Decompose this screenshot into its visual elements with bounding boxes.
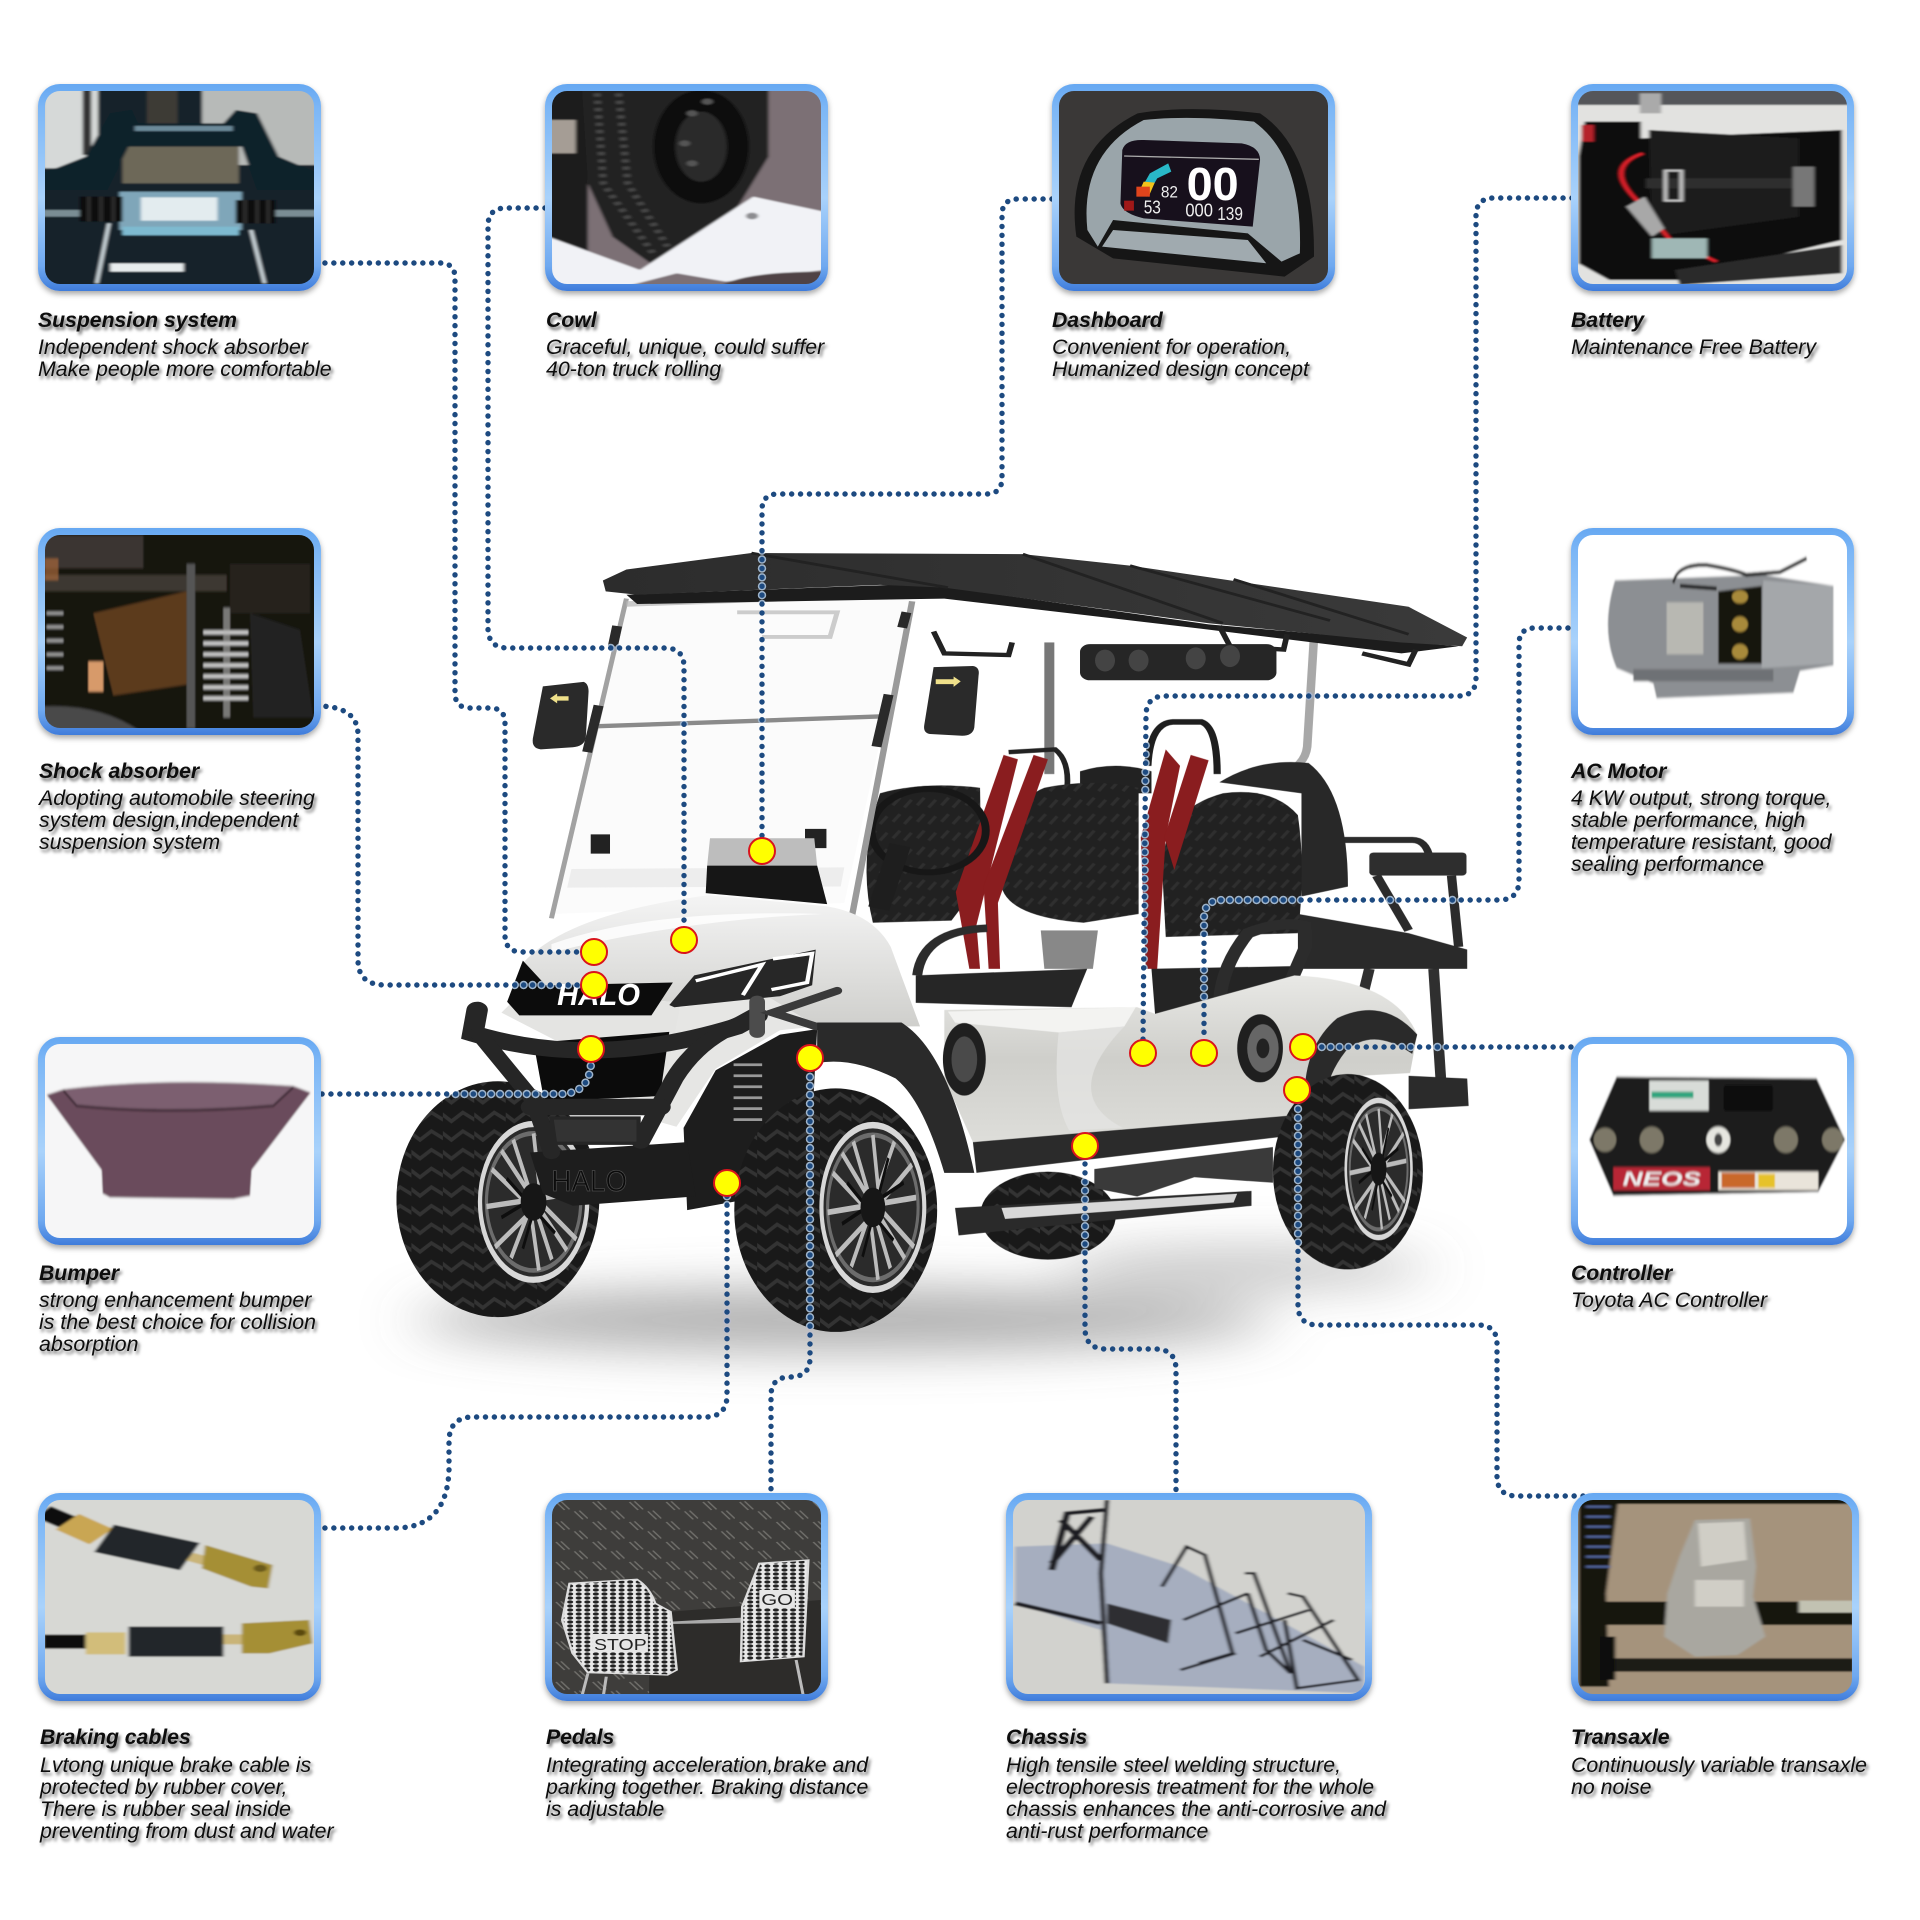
panel: chassis: [1003, 1493, 1387, 1843]
description: electrophoresis treatment for the whole: [1006, 1775, 1374, 1799]
photo: pedals: STOP: [594, 1636, 647, 1654]
suspension spring: [684, 1029, 817, 1210]
description: [546, 335, 825, 381]
description: stable performance, high: [1571, 808, 1805, 832]
rear right wheel: [1273, 1074, 1423, 1269]
connector lines: [316, 198, 1590, 1528]
description: Maintenance Free Battery: [1571, 335, 1817, 359]
description: no noise: [1571, 1775, 1652, 1799]
seats: [866, 722, 1348, 1014]
description: Lvtong unique brake cable is: [40, 1753, 311, 1777]
connector: dashboard: [762, 199, 1052, 840]
rear seat frame: [1298, 840, 1469, 1109]
photo: AC motor: [1573, 531, 1850, 734]
description: parking together. Braking distance: [545, 1775, 869, 1799]
side speakers: [943, 1014, 1283, 1096]
golf cart illustration: [396, 553, 1469, 1352]
panel: bumper: [38, 1036, 321, 1356]
dash console: [706, 838, 827, 904]
description: [1052, 335, 1310, 381]
seat belts: [956, 749, 1209, 969]
photo: pedals: GO: [761, 1591, 793, 1609]
photo: suspension system: [45, 91, 314, 284]
description: [39, 1288, 316, 1356]
description: Humanized design concept: [1052, 357, 1310, 381]
description: High tensile steel welding structure,: [1006, 1753, 1341, 1777]
description: is the best choice for collision: [39, 1310, 316, 1334]
connector: braking cables: [316, 1195, 727, 1528]
description: system design,independent: [39, 808, 299, 832]
heading: Transaxle: [1571, 1726, 1670, 1749]
connector: bumper: [322, 1062, 591, 1094]
photo: braking cables: [45, 1500, 314, 1694]
heading: Controller: [1571, 1262, 1674, 1285]
description: is adjustable: [546, 1797, 665, 1821]
heading: Cowl: [546, 309, 598, 332]
armrests: [917, 924, 1306, 1014]
connector: suspension system: [316, 263, 585, 952]
connector: chassis: [1085, 1155, 1176, 1490]
front fender white: [657, 995, 817, 1127]
description: Toyota AC Controller: [1571, 1288, 1768, 1312]
photo: dashboard: 53: [1144, 196, 1161, 217]
panel: pedals: [545, 1493, 869, 1821]
description: absorption: [39, 1332, 138, 1356]
photo: dashboard: [1052, 87, 1334, 290]
panel: controller: [1571, 1037, 1854, 1312]
rear left wheel: [980, 1172, 1116, 1260]
front fender: [817, 1023, 974, 1173]
heading: Suspension system: [38, 309, 237, 332]
rear fender: [1304, 1010, 1417, 1120]
photo: pedals: [545, 1497, 827, 1697]
description: [1006, 1753, 1387, 1843]
heading: Battery: [1571, 309, 1645, 332]
connector: shock absorber: [317, 706, 590, 985]
description: chassis enhances the anti-corrosive and: [1006, 1797, 1387, 1821]
connector: transaxle: [1298, 1100, 1590, 1496]
description: Independent shock absorber: [38, 335, 309, 359]
rocker and step: [955, 1115, 1301, 1235]
description: [545, 1753, 869, 1821]
description: anti-rust performance: [1006, 1819, 1209, 1843]
front grille: HALO: [557, 977, 640, 1012]
heading: Braking cables: [40, 1726, 191, 1749]
photo: battery: [1572, 87, 1854, 287]
front skid plate: HALO: [551, 1165, 627, 1198]
front skid plate: [530, 1142, 696, 1206]
panel: dashboard: [1052, 84, 1335, 381]
headlight: [669, 950, 816, 1007]
panel: battery: [1571, 84, 1854, 359]
heading: Chassis: [1006, 1726, 1087, 1749]
description: preventing from dust and water: [39, 1819, 334, 1843]
panel: shock absorber: [37, 528, 321, 854]
photo: bumper: [40, 1036, 317, 1241]
photo: cowl: [545, 87, 827, 290]
photo: dashboard: 139: [1217, 203, 1243, 224]
description: Adopting automobile steering: [37, 786, 315, 810]
description: There is rubber seal inside: [40, 1797, 291, 1821]
description: [39, 1753, 334, 1843]
connector: pedals: [771, 1068, 810, 1492]
connector: cowl: [488, 208, 684, 930]
heading: Shock absorber: [39, 760, 201, 783]
photo: shock absorber: [40, 528, 318, 734]
photo: controller: [1573, 1038, 1850, 1244]
description: protected by rubber cover,: [39, 1775, 287, 1799]
description: temperature resistant, good: [1571, 830, 1833, 854]
steering wheel: [871, 789, 986, 908]
front right wheel: [734, 1088, 937, 1332]
panel: AC motor: [1570, 528, 1854, 876]
photo: dashboard: 000: [1185, 200, 1213, 221]
description: [37, 786, 315, 854]
description: [1571, 1753, 1867, 1799]
connector: controller: [1303, 1044, 1571, 1050]
hood: [501, 895, 920, 1125]
photo: chassis: [1003, 1497, 1376, 1697]
description: 40-ton truck rolling: [546, 357, 721, 381]
panel: cowl: [545, 84, 828, 381]
description: 4 KW output, strong torque,: [1571, 786, 1831, 810]
heading: Bumper: [39, 1262, 121, 1285]
windshield: [551, 590, 912, 993]
photo: transaxle: [1572, 1497, 1860, 1697]
description: suspension system: [39, 830, 220, 854]
roof canopy: [603, 553, 1467, 680]
photo: dashboard: 00: [1187, 158, 1239, 210]
description: Integrating acceleration,brake and: [546, 1753, 869, 1777]
panel: transaxle: [1571, 1493, 1867, 1799]
description: Graceful, unique, could suffer: [546, 335, 825, 359]
photo: controller: NEOS: [1623, 1168, 1701, 1190]
connector: battery: [1143, 198, 1572, 1040]
panel: suspension system: [37, 84, 332, 381]
callout markers: [578, 838, 1316, 1196]
ground shadow: [416, 1248, 1430, 1352]
photo: dashboard: 82: [1161, 183, 1178, 202]
heading: Dashboard: [1052, 309, 1164, 332]
side mirrors: [533, 666, 979, 749]
description: [38, 335, 332, 381]
description: sealing performance: [1571, 852, 1764, 876]
front bumper guard: [473, 991, 837, 1153]
description: strong enhancement bumper: [39, 1288, 312, 1312]
front left wheel: [396, 1081, 599, 1317]
heading: AC Motor: [1570, 760, 1668, 783]
front grille: [507, 961, 673, 1102]
description: Make people more comfortable: [38, 357, 332, 381]
roof supports: [1049, 631, 1314, 774]
side body panel: [944, 975, 1417, 1142]
connector: AC motor: [1204, 628, 1568, 1040]
description: Continuously variable transaxle: [1571, 1753, 1867, 1777]
heading: Pedals: [546, 1726, 615, 1749]
description: [1571, 786, 1833, 876]
panel: braking cables: [37, 1493, 334, 1843]
description: Convenient for operation,: [1052, 335, 1291, 359]
